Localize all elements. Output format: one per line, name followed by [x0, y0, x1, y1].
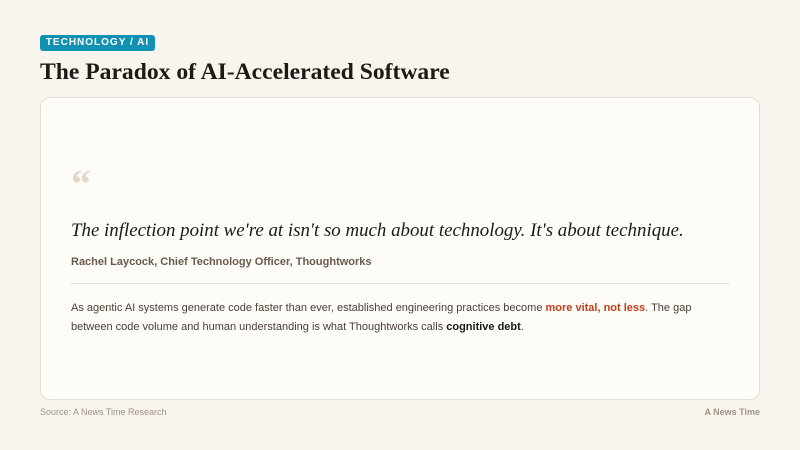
tag: category: TECHNOLOGY / AI: [46, 37, 149, 48]
footer: source: Source: A News Time Research: [40, 407, 167, 417]
tag: category: [40, 35, 155, 51]
icon: quote mark: “: [71, 161, 91, 206]
title: The Paradox of AI-Accelerated Software: [40, 59, 450, 85]
attribution: Rachel Laycock, Chief Technology Officer, Thoughtworks: [71, 256, 372, 268]
quote text: The inflection point we're at isn't so much about technology. It's about technique.: [71, 220, 684, 241]
body text: As agentic AI systems generate code faster than ever, established engineering practices become more vital, not less. The gap between code volume and human understanding is what Thoughtworks calls cognitive debt.: [71, 302, 691, 333]
panel: quote card: [40, 97, 760, 400]
footer: brand: A News Time: [704, 407, 760, 417]
